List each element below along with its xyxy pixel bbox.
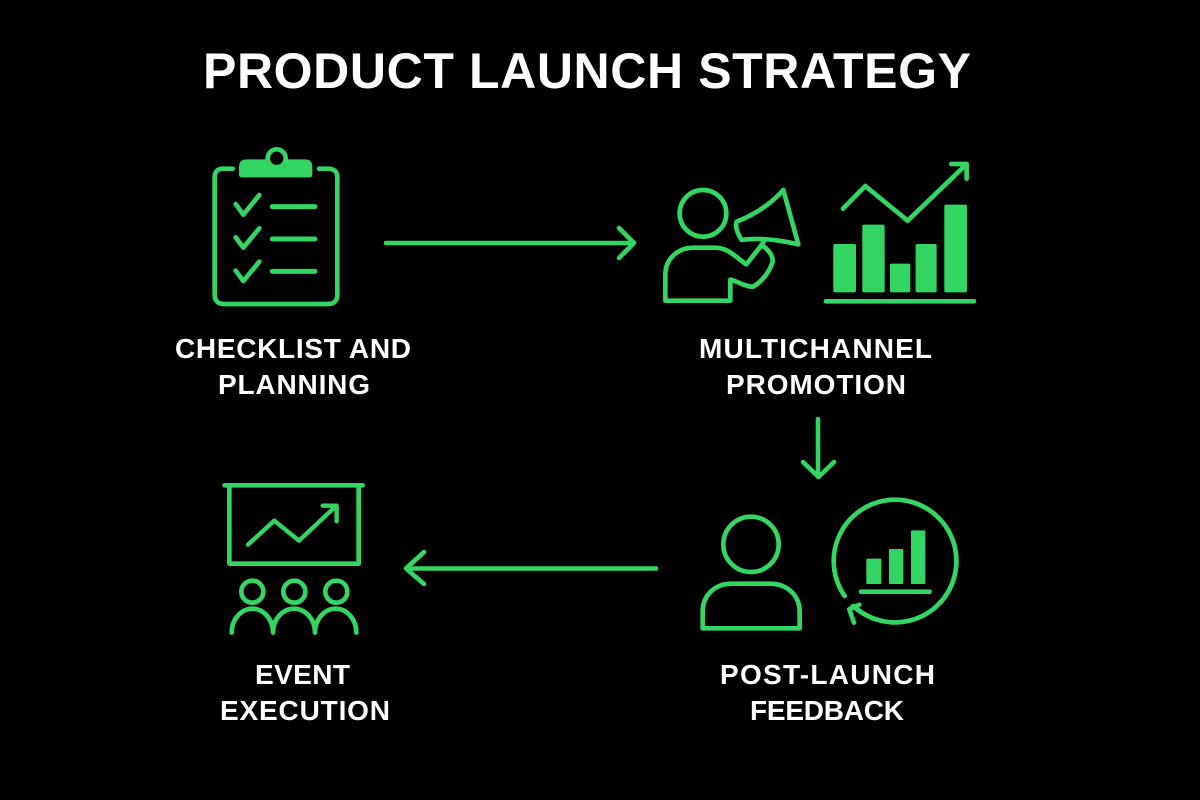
label: multichannel promotion: PROMOTION (726, 369, 906, 400)
label: checklist and planning: CHECKLIST AND (175, 333, 411, 364)
label: checklist and planning (175, 333, 411, 400)
icon: bar chart with rising arrow (826, 164, 974, 301)
arrow: planning to promotion (386, 228, 634, 258)
label: event execution: EVENT (255, 659, 350, 690)
arrow: promotion to feedback (803, 419, 834, 477)
label: multichannel promotion: MULTICHANNEL (699, 333, 932, 364)
label: post-launch feedback (720, 659, 935, 726)
icon: person (703, 517, 800, 628)
arrow: feedback to event (406, 552, 656, 584)
icon: clipboard checklist (215, 149, 337, 304)
icon: presentation screen with audience (225, 485, 363, 633)
icon: feedback cycle chart (834, 500, 956, 623)
label: post-launch feedback: FEEDBACK (750, 695, 904, 726)
icon: person with megaphone (665, 190, 798, 301)
label: multichannel promotion (699, 333, 932, 400)
label: post-launch feedback: POST-LAUNCH (720, 659, 935, 690)
label: event execution (220, 659, 390, 726)
title: PRODUCT LAUNCH STRATEGY (203, 43, 971, 99)
label: checklist and planning: PLANNING (218, 369, 370, 400)
label: event execution: EXECUTION (220, 695, 390, 726)
